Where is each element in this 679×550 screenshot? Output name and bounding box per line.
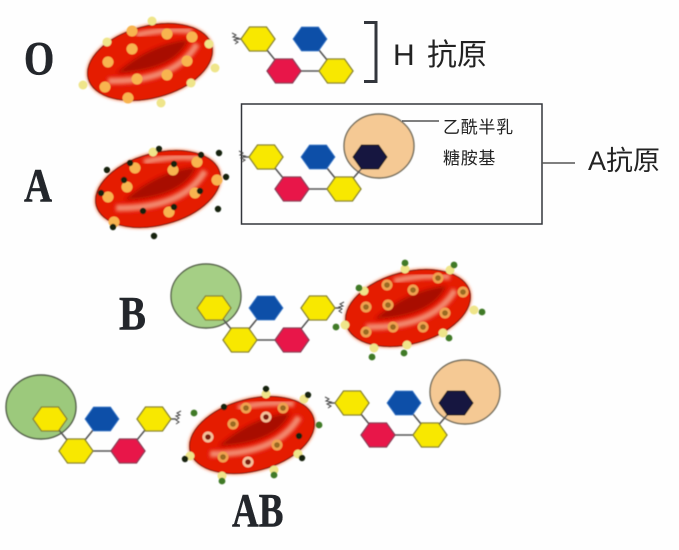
antigen chain: B antigen on AB cell: [6, 375, 181, 463]
leader line: [402, 120, 439, 122]
label: N-acetylgalactosamine: 乙酰半乳: [443, 118, 514, 137]
label: type B: B: [119, 287, 146, 340]
label: A antigen with leader line: [542, 146, 660, 176]
antigen chain: H antigen: [232, 27, 353, 83]
label: type A: A: [24, 160, 53, 212]
panel: A antigen box: [239, 104, 542, 224]
label: N-acetylgalactosamine: [443, 118, 514, 168]
antigen chain: B antigen: [171, 264, 344, 352]
red blood cell: type B: [333, 255, 485, 361]
label: type O: O: [24, 33, 54, 85]
red blood cell: type O: [77, 9, 223, 115]
label: type AB: AB: [232, 485, 284, 538]
label: H antigen: 抗原: [427, 39, 487, 72]
red blood cell: type AB: [179, 382, 325, 488]
label: A antigen with leader line: A抗原: [588, 146, 660, 176]
label: H antigen: H: [393, 39, 415, 72]
antigen chain: A antigen: [239, 114, 414, 201]
bracket: [364, 22, 376, 82]
label: N-acetylgalactosamine: 糖胺基: [443, 149, 496, 168]
antigen chain: A antigen on AB cell: [325, 360, 500, 447]
red blood cell: type A: [85, 136, 231, 242]
